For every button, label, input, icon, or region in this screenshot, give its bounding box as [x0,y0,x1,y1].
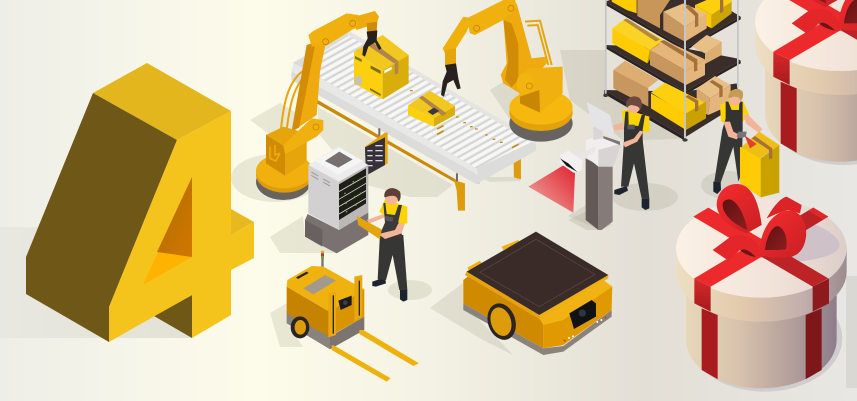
right wall shade [846,276,857,388]
worker scanning tall box [713,89,779,197]
scanner pillar and kiosk [560,102,622,230]
worker at kiosk [613,96,649,210]
forklift robot [287,251,419,382]
middle tier boxes [692,35,722,53]
gripper: left arm [362,30,382,57]
warehouse shelving with boxes [603,0,741,142]
bottom shelf [604,83,740,137]
gift box: bottom right [676,184,847,392]
box on conveyor: small [408,91,455,127]
middle shelf [605,45,741,92]
box on conveyor: large [354,35,409,99]
top shelf [605,0,741,48]
server cabinet [305,147,368,253]
conveyor belt [292,31,536,184]
gift box: top right [755,0,857,165]
top tier boxes [612,0,637,13]
robot arm: right [441,0,573,142]
number four [26,63,254,342]
mobile robot platform [463,232,612,355]
control panel on conveyor [365,128,458,181]
conveyor legs and cross beam [317,99,521,211]
scanner cone [528,163,575,213]
robot arm: left [256,11,379,200]
floor shadows [0,50,753,355]
bottom tier boxes [697,76,731,98]
worker with tablet [357,188,407,302]
shelf poles [605,0,607,95]
